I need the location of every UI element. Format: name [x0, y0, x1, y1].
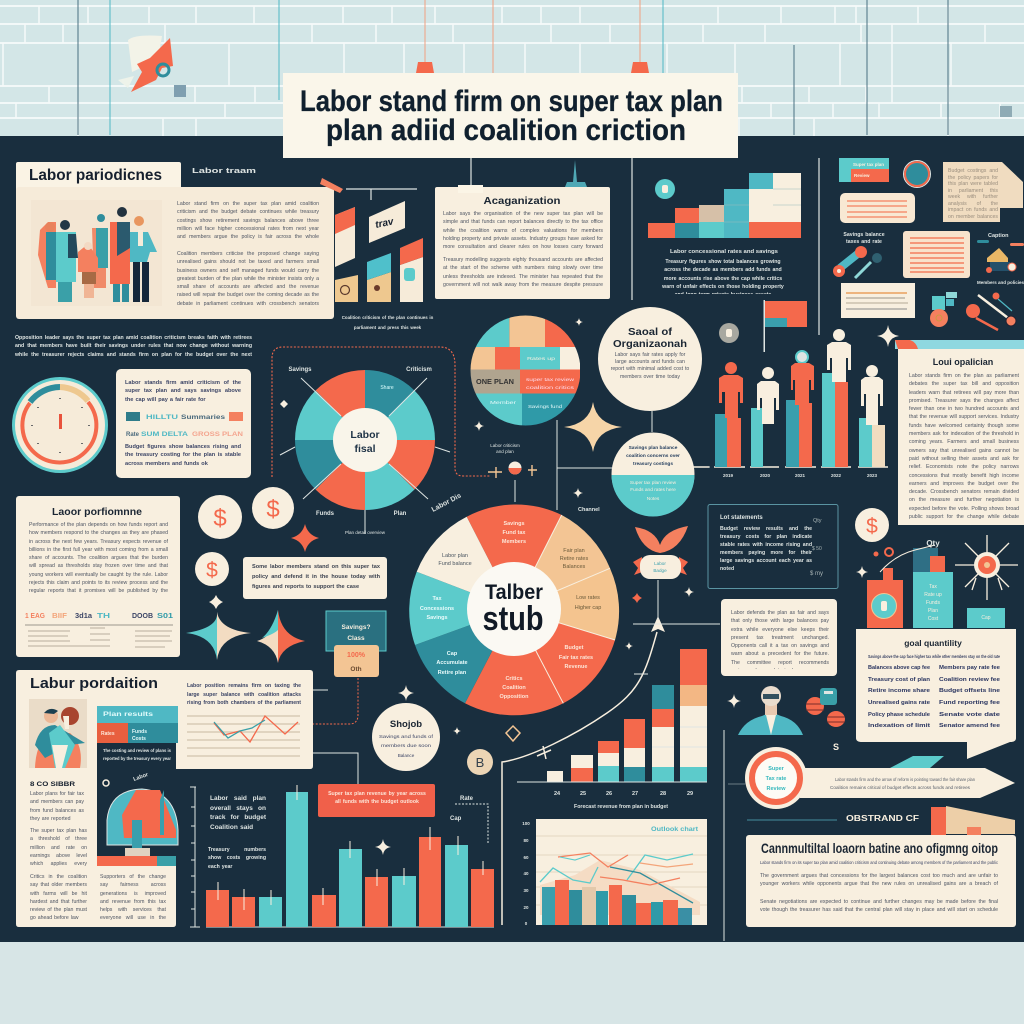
- icon: dollar coin 4: [855, 508, 889, 542]
- chart: big pie Talber stub: Critics: [505, 676, 523, 682]
- chart: bars with people: 2021: [795, 473, 806, 478]
- chart: tile pie: Rates up: [527, 356, 556, 361]
- icon: building chart: Rate up: [924, 592, 942, 598]
- circle: split teal note: treasury costings: [633, 461, 673, 467]
- block: dark illustration: Labor: [133, 772, 150, 783]
- icon: sun burst: [955, 535, 1018, 600]
- chart: big pie Talber stub: Cap: [447, 651, 458, 657]
- chart: big pie Talber stub: Retire plan: [438, 670, 467, 676]
- circle: Shojob: members due soon: [381, 743, 432, 748]
- icon: peach star: [564, 402, 622, 452]
- panel: Acaganization: [435, 185, 610, 299]
- chart axis labels: 30: [523, 888, 529, 893]
- chart: stepped bars: [648, 173, 801, 238]
- stars: [209, 318, 899, 855]
- chart: big pie Talber stub: Concessions: [420, 606, 454, 612]
- chart: mountain line chart: Outlook chart: [651, 827, 698, 833]
- chart: big pie Talber stub: Savings: [426, 615, 448, 621]
- panel: speech note: Senator amend fee: [939, 723, 1000, 729]
- icon: orange star: [291, 524, 319, 552]
- callout: wide note: [243, 557, 387, 599]
- panel: outlined dark note: Lot statements: [720, 515, 763, 521]
- block: dark illustration: The costing and review of plans is: [103, 748, 171, 753]
- text: side label: [450, 796, 488, 843]
- icon: man in suit: [738, 686, 803, 735]
- chart: donut Labor fisal: Savings: [288, 367, 312, 373]
- text: left column 3: Critics in the coalition say that older members with farms will be hit hardest and that further review of the plan must go ahead before law: [30, 874, 87, 921]
- chart: donut Labor fisal: Plan: [394, 511, 407, 517]
- chart: big pie Talber stub: Opposition: [499, 694, 529, 700]
- circle: Saoal of Organizaonah: [598, 307, 702, 411]
- icon: flag: [764, 300, 807, 352]
- text: side label: Rate: [460, 796, 474, 802]
- icon cards: slanted tiles: [320, 178, 423, 302]
- chart: big pie Talber stub: [409, 504, 619, 715]
- chart: stacked bars: 29: [687, 791, 693, 797]
- panel: speech note: Senate vote date: [939, 712, 1000, 718]
- text: chart caption: Labor concessional rates and savings: [670, 249, 778, 255]
- chart: tile pie: Member: [490, 400, 517, 405]
- icon: gold diamond: [506, 726, 520, 741]
- icon: magnifier and pin: [966, 292, 1016, 330]
- chart: stacked bars: 27: [632, 791, 638, 797]
- panel: Loui opalician: Loui opalician: [933, 357, 993, 367]
- panel: outlined dark note: Qty: [813, 518, 822, 524]
- label: slanted caption: Labor Dis: [431, 492, 463, 514]
- icon: coin stacks: [806, 688, 845, 727]
- chart: big pie Talber stub: Revenue: [565, 664, 587, 670]
- chart axis labels: 0: [525, 921, 528, 926]
- icon: two-tone star right: [257, 610, 305, 663]
- panel: rate card: Labor stands firm amid criticism of the super tax plan and says savings above the cap will pay a fair rate for: [125, 380, 241, 403]
- chart axis labels: 100: [522, 821, 530, 826]
- icon: building chart: Qty: [926, 539, 940, 548]
- chart: lower bars: [190, 785, 494, 927]
- chart: big pie Talber stub: Fair tax rates: [559, 655, 593, 661]
- callout: orange label: [318, 784, 435, 817]
- circle: Shojob: Savings and funds of: [379, 734, 434, 739]
- chart axis labels: 60: [523, 855, 529, 860]
- chart: big pie Talber stub: Savings: [503, 521, 525, 527]
- illustration: portrait: [29, 699, 87, 768]
- icon: gauge dial: [12, 377, 108, 473]
- panel: speech note: Members pay rate fee: [939, 665, 1000, 671]
- badge: ring: [745, 747, 807, 809]
- title banner: Labor stand firm on super tax plan: [300, 85, 723, 118]
- panel: Labor porfiomnne: [16, 496, 180, 657]
- callout: orange text block: [903, 231, 970, 278]
- dotted connector: [272, 347, 490, 477]
- panel: rate card: HILLTU: [146, 415, 178, 421]
- chart: donut Labor fisal: [280, 367, 450, 535]
- card: teal and orange label: Review: [854, 173, 870, 178]
- icon: blocks and coin: [930, 292, 957, 327]
- text: side note: Coalition criticism of the plan continues in parliament and press this week: [342, 315, 433, 330]
- circle: split teal note: Notes: [647, 496, 660, 502]
- panel: speech note: Indexation of limit: [868, 723, 930, 729]
- badge: ring: Tax rate: [766, 776, 786, 782]
- icon: dollar coin 3: [195, 552, 229, 586]
- callout: cream note: [841, 283, 915, 318]
- chart: big pie Talber stub: Higher cap: [575, 605, 601, 611]
- block: teal header table: Plan results: [103, 712, 154, 718]
- icon: teal tower: [565, 160, 587, 187]
- icon: teal badge: [655, 179, 675, 199]
- block: teal header table: Funds: [132, 729, 147, 735]
- panel: speech note: Balances above cap fee: [868, 665, 930, 671]
- dotted connector 2: [313, 678, 358, 724]
- vertical rule: [723, 730, 725, 941]
- panel: speech note: Treasury cost of plan: [868, 677, 930, 683]
- circle: Saoal of Organizaonah: Organizaonah: [613, 338, 687, 350]
- text: side label: Cap: [450, 816, 462, 822]
- chart: tile pie: ONE PLAN: [476, 379, 514, 386]
- chart: bars with people: 2020: [760, 473, 771, 478]
- circle: split teal note: Funds and rates here: [630, 487, 676, 493]
- panel: Labor porfiomnne: Laoor porfiomnne: [52, 507, 142, 518]
- panel: Labor porfiomnne: TH: [97, 613, 110, 620]
- title banner: [283, 62, 738, 158]
- card: teal ticket: [326, 611, 386, 677]
- chart: stacked bars: Forecast revenue from plan in budget: [574, 804, 668, 810]
- panel: Labor pariodicnes: Labor pariodicnes: [29, 167, 162, 184]
- icon: tan token: B: [476, 755, 484, 770]
- icon: building chart: Cost: [928, 616, 939, 622]
- chart axis labels: 80: [523, 838, 529, 843]
- panel: Loui opalician: [895, 340, 1024, 525]
- dark main board: [0, 136, 1024, 942]
- circle: Shojob: Shojob: [390, 719, 422, 730]
- panel: Labor porfiomnne: S01: [157, 613, 173, 620]
- icon cards: slanted tiles: trav: [374, 216, 396, 231]
- circle: split teal note: [612, 432, 694, 516]
- icon: tools: [833, 246, 882, 278]
- icon: dollar coin 1: $: [213, 505, 227, 532]
- chart: tile pie: [470, 315, 580, 426]
- icon: dollar coin 2: $: [266, 496, 280, 523]
- chart: big pie Talber stub: Retire rates: [560, 556, 588, 562]
- icon: dollar coin 2: [252, 487, 294, 529]
- graphic: folded shape: [931, 806, 1015, 835]
- icon: dollar coin 4: $: [866, 515, 878, 538]
- chart: tile pie: super tax review: [526, 377, 575, 382]
- card: teal and orange label: [839, 158, 889, 182]
- icon: building chart: Funds: [926, 600, 940, 606]
- brick wall background: [0, 0, 1024, 137]
- card: teal ticket: Savings?: [342, 624, 370, 631]
- chart: big pie Talber stub: Accumulate: [436, 660, 468, 666]
- card: teal and orange label: Super tax plan: [853, 162, 884, 167]
- chart: small line chart: [187, 716, 300, 756]
- text: left column 1: Labor plans for fair tax and members can pay from fund balances as they are reported: [30, 791, 84, 822]
- chart: big pie Talber stub: Fund tax: [503, 530, 526, 536]
- chart: big pie Talber stub: Fair plan: [563, 548, 585, 554]
- icon: leaf ribbon badge: Badge: [653, 568, 667, 573]
- panel: speech note: Retire income share: [868, 688, 930, 694]
- figure: person 4: [827, 329, 851, 382]
- icon: dollar coin 1: [198, 495, 242, 539]
- banner: arrow: Labor stands firm and the arrow of reform is pointing toward the fair share plan: [835, 777, 975, 782]
- panel: conclusion: [746, 835, 1016, 927]
- icon: building chart: [867, 539, 1005, 628]
- chart: big pie Talber stub: Labor plan: [442, 553, 468, 559]
- card: teal ticket: Oth: [350, 666, 362, 673]
- chart: big pie Talber stub: Fund balance: [438, 561, 472, 567]
- chart: big pie Talber stub: Low rates: [576, 595, 600, 601]
- figure: person 2: [757, 367, 779, 424]
- text: chart notes: Labor said plan overall stays on track for budget Coalition said: [210, 795, 266, 830]
- icon: small red diamond: [632, 593, 642, 603]
- chart: big pie Talber stub: Budget: [565, 645, 584, 651]
- panel: outlined dark note: $ my: [810, 571, 823, 577]
- floor strip: [0, 942, 1024, 1024]
- callout: orange lines box: [840, 193, 915, 223]
- panel: speech note: Budget offsets line: [939, 688, 1000, 694]
- chart axis labels: 40: [523, 871, 529, 876]
- panel: speech note: Fund reporting fee: [939, 700, 1000, 706]
- chart: big pie Talber stub: Talber: [485, 581, 543, 604]
- circle: split teal note: Savings plan balance: [629, 445, 678, 451]
- block: teal header table: Rates: [101, 731, 115, 737]
- icon: grey token: [719, 323, 739, 343]
- badge: ring: Super: [768, 766, 785, 772]
- icon: building chart: Cap: [981, 615, 991, 621]
- chart: big pie Talber stub: Balances: [563, 564, 586, 570]
- icon: leaf ribbon badge: [633, 526, 688, 579]
- panel: Labor porfiomnne: DOOB: [132, 613, 153, 620]
- card: teal ticket: Class: [347, 635, 365, 642]
- icon: dollar coin 3: $: [206, 559, 218, 582]
- circle: split teal note: coalition concerns over: [626, 453, 680, 459]
- panel: speech note: Unrealised gains rate: [868, 700, 930, 706]
- chart: stacked bars: 28: [660, 791, 666, 797]
- chart axis labels: [522, 821, 530, 926]
- icon: two-tone star left: [186, 612, 251, 660]
- panel: Acaganization: Acaganization: [484, 196, 560, 207]
- panel: speech note: [856, 629, 1016, 759]
- panel: rate card: Rate: [126, 432, 140, 438]
- icon: hat and tokens: [977, 240, 1024, 273]
- circle: Shojob: [372, 703, 440, 771]
- connector: [313, 690, 358, 784]
- chart: donut Labor fisal: fisal: [354, 443, 376, 455]
- chart: tile pie: Savings fund: [528, 404, 563, 409]
- hanging connectors: [346, 158, 819, 335]
- chart: big pie Talber stub: Tax: [432, 596, 442, 602]
- text: side heading: 8 CO SIBBR: [30, 782, 76, 788]
- figure: person 1: [719, 362, 743, 418]
- card: teal ticket: 100%: [347, 652, 366, 659]
- panel: Labor porfiomnne: 1 EAG: [25, 613, 46, 620]
- label: tiny sign: S: [833, 742, 839, 752]
- panel: Labur pordaition: Labur pordaition: [30, 675, 158, 692]
- icon: building chart: Tax: [929, 584, 937, 590]
- block: teal header table: Costs: [132, 736, 146, 742]
- chart: tile pie: coalition critics: [526, 385, 575, 390]
- label: side note: Channel: [578, 507, 600, 513]
- chart: donut Labor fisal: Labor: [350, 429, 380, 441]
- panel: speech note: Policy phase schedule: [868, 712, 930, 718]
- badge: ring: Review: [767, 786, 786, 792]
- chart: bars with people: 2019: [723, 473, 734, 478]
- heading: observed: OBSTRAND CF: [846, 814, 919, 823]
- callout: wide note: Some labor members stand on this super tax policy and defend it in the house today with figures and reports to support the case: [252, 564, 380, 590]
- chart: donut Labor fisal: Share: [380, 385, 394, 391]
- icon: rocket ribbon and gear: [118, 36, 173, 92]
- panel: rate card: SUM DELTA: [141, 432, 189, 438]
- arrow: curve up: [502, 580, 720, 925]
- chart: stacked bars: 26: [606, 791, 612, 797]
- chart: bars with people: 2022: [831, 473, 842, 478]
- label: caption: Caption: [988, 233, 1009, 239]
- figure: person 3: [791, 351, 814, 405]
- connectors: [515, 411, 710, 510]
- panel: Labor porfiomnne: 3d1a: [75, 613, 92, 620]
- icon: tan token: [467, 749, 493, 775]
- banner: arrow: [728, 747, 1015, 809]
- panel: rate card: Budget figures show balances rising and the treasury costing for the plan is stable across members and funds ok: [125, 444, 241, 467]
- chart axis labels: 20: [523, 905, 529, 910]
- chart: bars with people: [690, 329, 888, 478]
- circle: Saoal of Organizaonah: Saoal of: [628, 326, 673, 338]
- icon: ring: [904, 160, 930, 188]
- chart: mountain line chart: [536, 819, 707, 925]
- panel: outlined dark note: Budget review results and the treasury costs for plan indicate stable rates with income rising and members paying more for their large savings account each year as noted: [720, 526, 812, 572]
- chart: stacked bars: 25: [580, 791, 586, 797]
- panel: rate card: Summaries: [181, 415, 226, 421]
- circle: Shojob: Balance: [398, 753, 415, 758]
- label: Labor traam: Labor traam: [192, 166, 256, 175]
- callout: orange label: Super tax plan revenue by year across all funds with the budget outlook: [328, 791, 426, 805]
- block: dark illustration: reported by the treasury every year: [103, 756, 171, 761]
- chart: stacked bars: 24: [554, 791, 561, 797]
- title banner: plan adiid coalition criction: [326, 114, 686, 147]
- panel: speech note: goal quantility: [904, 638, 962, 648]
- chart: big pie Talber stub: Coalition: [502, 685, 526, 691]
- block: teal header table: [97, 706, 178, 743]
- chart: donut Labor fisal: Plan detail overview: [345, 530, 386, 535]
- circle: Saoal of Organizaonah: Labor says fair rates apply for large accounts and funds can report with minimal added cost to members over time today: [611, 352, 689, 380]
- chart: stacked bars: [517, 649, 707, 810]
- text: small line: Members and policies: [977, 280, 1024, 285]
- icon: spark ornament: and plan: [496, 449, 514, 454]
- chart: big pie Talber stub: stub: [482, 600, 544, 638]
- panel: Labur pordaition: [16, 670, 313, 927]
- panel: Labor pariodicnes: [16, 162, 334, 319]
- panel: Labor porfiomnne: BIIF: [52, 613, 68, 620]
- panel: speech note: Coalition review fee: [939, 677, 1000, 683]
- panel: outlined dark note: [708, 504, 838, 588]
- panel: outlined dark note: $ 50: [812, 546, 822, 552]
- chart: big pie Talber stub: Members: [502, 539, 526, 545]
- panel: rate card: GROSS PLAN: [192, 432, 243, 438]
- chart: donut Labor fisal: Funds: [316, 511, 335, 517]
- panel: rate card: [116, 369, 251, 478]
- icon: spark ornament: [488, 443, 537, 478]
- block: dark illustration: [97, 743, 178, 866]
- icon: building chart: Plan: [928, 608, 938, 614]
- chart: bars with people: 2023: [867, 473, 878, 478]
- text: chart subnote: Treasury numbers show costs growing each year: [208, 847, 266, 870]
- banner: arrow: Coalition remains critical of budget effects across funds and retirees: [830, 785, 971, 790]
- figure: person 5: [861, 365, 883, 425]
- icon: leaf ribbon badge: Labor: [654, 561, 666, 566]
- document panel: [943, 162, 1023, 222]
- chart: donut Labor fisal: Criticism: [406, 367, 432, 373]
- circle: split teal note: Super tax plan review: [630, 480, 677, 486]
- illustration: group of people: [31, 200, 162, 306]
- icon: spark ornament: Labor criticism: [490, 443, 520, 448]
- panel: cream notes: [721, 599, 837, 676]
